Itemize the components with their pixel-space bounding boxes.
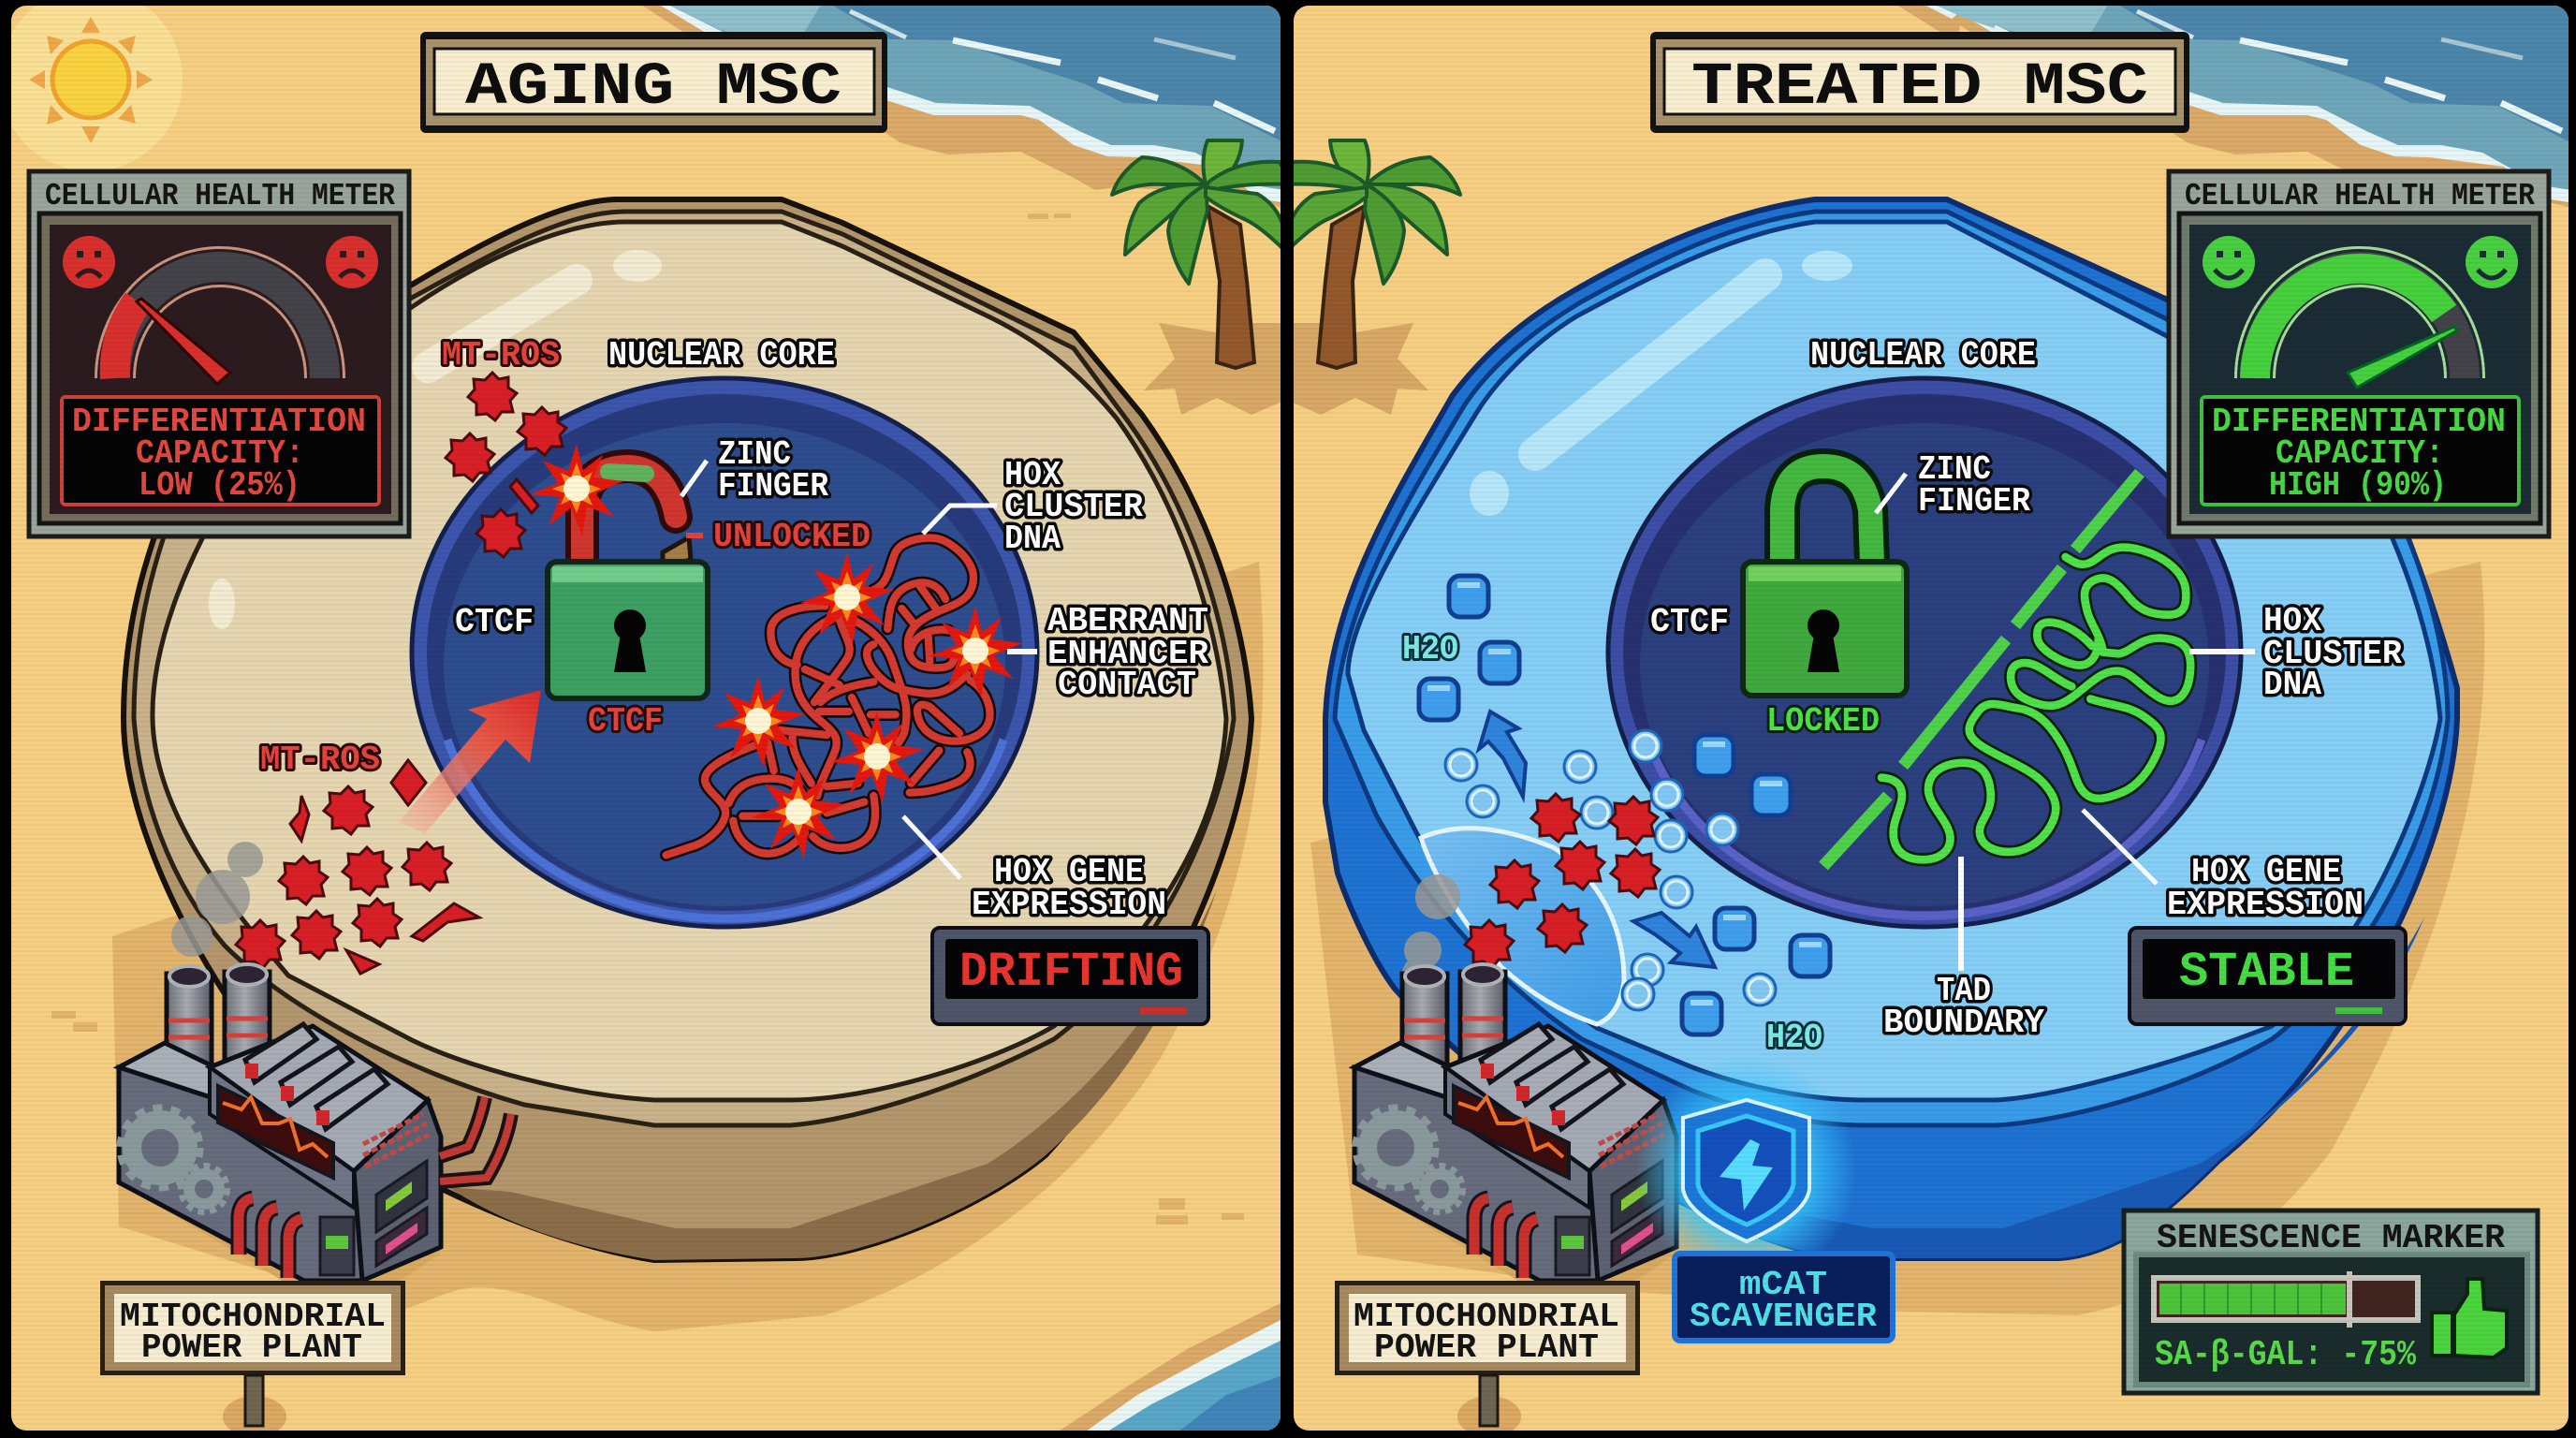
differentiation readout: [62, 397, 379, 505]
differentiation readout: LOW (25%): [139, 466, 300, 505]
differentiation readout: CAPACITY:: [2276, 434, 2444, 473]
status: DRIFTING: [932, 928, 1208, 1024]
labels: aging nucleus: HOX: [1004, 456, 1061, 494]
sign: mitochondrial power plant: POWER PLANT: [141, 1328, 362, 1367]
ocean top right: [642, 6, 1281, 207]
labels: aging nucleus: NUCLEAR CORE: [608, 336, 835, 374]
sand specks: [51, 213, 1244, 1225]
title: TREATED MSC: TREATED MSC: [1691, 54, 2148, 122]
labels: aging nucleus: MT-ROS: [442, 336, 560, 374]
labels: treated nucleus: H2O: [1766, 1019, 1822, 1057]
water shield dome with scavenged ROS: [1421, 829, 1624, 1024]
factory: mitochondrial power plant: [1354, 964, 1676, 1297]
sign: mitochondrial power plant: POWER PLANT: [1374, 1328, 1599, 1367]
labels: treated nucleus: CLUSTER: [2263, 635, 2402, 673]
cell shadow on sand: [1310, 562, 2484, 1315]
sign: mitochondrial power plant: [100, 1281, 405, 1437]
meter: cellular health low: CELLULAR HEALTH METER: [45, 179, 395, 213]
labels: aging nucleus: FINGER: [718, 467, 828, 506]
title: AGING MSC: [420, 32, 887, 133]
factory: mitochondrial power plant: [119, 964, 511, 1297]
ROS particles: [236, 373, 566, 974]
meter: cellular health low: [29, 171, 409, 536]
labels: treated nucleus: HOX: [2263, 602, 2321, 640]
ocean bottom right corner: [1060, 1303, 1281, 1431]
meter: senescence marker: SENESCENCE MARKER: [2157, 1219, 2505, 1257]
differentiation readout: DIFFERENTIATION: [2212, 403, 2506, 441]
palm tree: [1266, 140, 1460, 415]
labels: treated nucleus: FINGER: [1918, 482, 2030, 521]
labels: aging nucleus: MT-ROS: [260, 741, 380, 779]
labels: aging nucleus: ENHANCER: [1047, 635, 1208, 673]
sign: mitochondrial power plant: MITOCHONDRIAL: [1354, 1298, 1619, 1336]
panel: treated MSC: [1266, 0, 2576, 1437]
labels: treated nucleus: TAD: [1937, 972, 1991, 1010]
labels: treated nucleus: NUCLEAR CORE: [1810, 336, 2036, 374]
meter: senescence marker: [2124, 1211, 2538, 1393]
meter: cellular health high: [2169, 171, 2549, 536]
labels: aging nucleus: CONTACT: [1058, 666, 1196, 704]
labels: aging nucleus: DNA: [1004, 520, 1061, 558]
icon: thumbs up: [2432, 1279, 2507, 1357]
sad face right: [326, 236, 378, 288]
labels: treated nucleus: CTCF: [1650, 603, 1729, 641]
title: TREATED MSC: [1650, 32, 2189, 133]
tangled red HOX DNA: [666, 538, 1022, 858]
labels: treated nucleus: LOCKED: [1766, 702, 1880, 741]
label: mCAT scavenger: SCAVENGER: [1690, 1298, 1877, 1336]
meter: senescence marker: SA-β-GAL: -75%: [2155, 1335, 2416, 1375]
gauge: [115, 267, 325, 384]
sign: mitochondrial power plant: MITOCHONDRIAL: [120, 1298, 386, 1336]
status: DRIFTING: DRIFTING: [959, 945, 1183, 1000]
labels: treated nucleus: ZINC: [1918, 450, 1991, 489]
sad face left: [63, 236, 115, 288]
ocean top right: [1889, 0, 2576, 225]
status: STABLE: STABLE: [2179, 945, 2354, 1000]
water droplets and bubbles: [1419, 576, 1830, 1034]
labels: treated nucleus: BOUNDARY: [1883, 1004, 2044, 1042]
label: mCAT scavenger: [1675, 1254, 1893, 1341]
labels: aging nucleus: EXPRESSION: [972, 886, 1166, 924]
labels: treated nucleus: EXPRESSION: [2167, 886, 2364, 924]
labels: treated nucleus: H2O: [1402, 630, 1458, 668]
icon: sun: [11, 6, 183, 169]
differentiation readout: [2202, 397, 2519, 505]
differentiation readout: CAPACITY:: [136, 434, 304, 473]
ROS particles neutralised: [1465, 794, 1660, 968]
happy face left: [2203, 236, 2255, 288]
labels: aging nucleus: ABERRANT: [1047, 602, 1208, 640]
labels: aging nucleus: ZINC: [718, 435, 791, 474]
labels: treated nucleus: DNA: [2263, 666, 2321, 704]
cell: treated body: [1325, 199, 2457, 1258]
TAD boundary line: [1823, 473, 2140, 866]
differentiation readout: DIFFERENTIATION: [72, 403, 366, 441]
palm tree: [1110, 139, 1281, 415]
labels: aging nucleus: UNLOCKED: [713, 518, 871, 556]
icon: mCAT shield: [1636, 1056, 1857, 1284]
smoke: [1402, 874, 1460, 990]
labels: aging nucleus: CTCF: [455, 603, 534, 641]
organized green HOX DNA: [1881, 548, 2190, 859]
cell: aging body: [124, 199, 1251, 1260]
labels: aging nucleus: [260, 336, 1208, 924]
labels: treated nucleus: HOX GENE: [2191, 853, 2341, 891]
labels: aging nucleus: CLUSTER: [1004, 488, 1143, 526]
icon: open padlock with damaged shackle: [530, 444, 708, 698]
smoke: [171, 842, 263, 957]
red arrow: [399, 690, 541, 833]
sign: mitochondrial power plant: [1335, 1281, 1640, 1437]
cell shadow on sand: [112, 562, 1263, 1331]
gauge: [2255, 267, 2465, 388]
nucleus: aging: [412, 378, 1037, 927]
labels: aging nucleus: CTCF: [588, 702, 663, 741]
nucleus: treated: [1608, 378, 2241, 927]
differentiation readout: HIGH (90%): [2269, 466, 2447, 505]
labels: treated nucleus: [1402, 336, 2402, 1057]
happy face right: [2466, 236, 2518, 288]
meter: cellular health high: CELLULAR HEALTH METER: [2185, 179, 2535, 213]
green padlock: [1743, 466, 1907, 696]
blue water arrows: [1479, 712, 1715, 967]
status: STABLE: [2130, 928, 2406, 1024]
title: AGING MSC: AGING MSC: [465, 54, 842, 122]
progress bar: [2154, 1271, 2418, 1328]
label: mCAT scavenger: mCAT: [1739, 1266, 1827, 1304]
labels: aging nucleus: HOX GENE: [994, 853, 1144, 891]
panel: aging MSC: [0, 0, 1357, 1438]
